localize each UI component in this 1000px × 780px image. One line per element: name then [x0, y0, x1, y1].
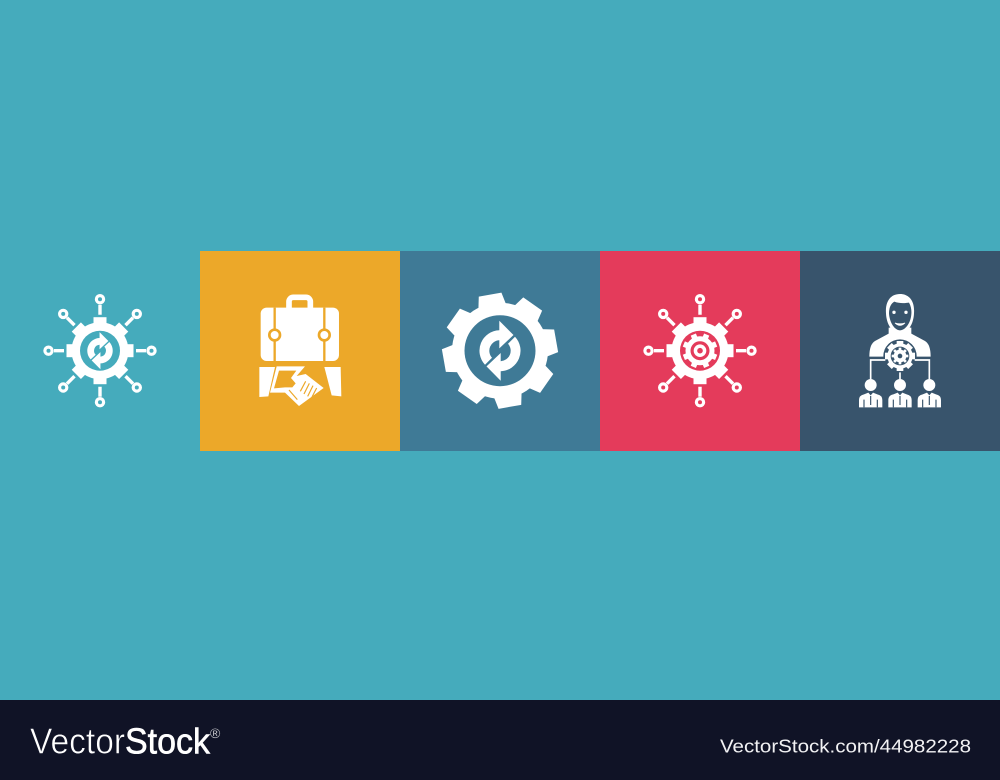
icon: handshake with sleeves [259, 366, 341, 406]
image id text: VectorStock.com/44982228 [720, 736, 971, 756]
network nodes [45, 296, 155, 406]
logo: VectorStock [30, 720, 221, 762]
panel: navy tile [800, 251, 1000, 451]
briefcase straps [275, 308, 324, 361]
briefcase handle [289, 297, 310, 314]
central gear [885, 341, 915, 371]
outer gear [666, 317, 734, 384]
gear halo [883, 339, 917, 373]
icon: briefcase with handshake [261, 297, 339, 361]
connectors [871, 360, 929, 379]
logo: VectorStock: Stock [125, 720, 211, 762]
manager face [892, 311, 896, 314]
gear teeth [66, 317, 134, 384]
panel: orange tile [200, 251, 400, 451]
team member right [918, 379, 941, 407]
refresh arrows [87, 332, 113, 369]
network nodes [645, 296, 755, 406]
icon: large gear with refresh arrows [434, 285, 566, 417]
gear teeth [434, 285, 566, 417]
logo: VectorStock: ® [210, 725, 221, 741]
team member left [859, 379, 882, 407]
team member centre [888, 379, 912, 407]
left sleeve [259, 367, 275, 397]
icon: manager with gear and team [859, 294, 941, 407]
icon: network gear with inner cog [645, 296, 755, 406]
manager shoulders [869, 328, 931, 357]
briefcase body [261, 308, 339, 361]
panel: red tile [600, 251, 800, 451]
inner cog [677, 328, 723, 374]
right sleeve [324, 367, 341, 396]
clasped hands [270, 366, 324, 406]
refresh arrows [479, 321, 521, 381]
panel: blue tile [400, 251, 600, 451]
icon: network gear with refresh arrows [45, 296, 155, 406]
footer bar [0, 700, 1000, 780]
manager head [886, 294, 914, 333]
logo: VectorStock: Vector [30, 720, 125, 762]
